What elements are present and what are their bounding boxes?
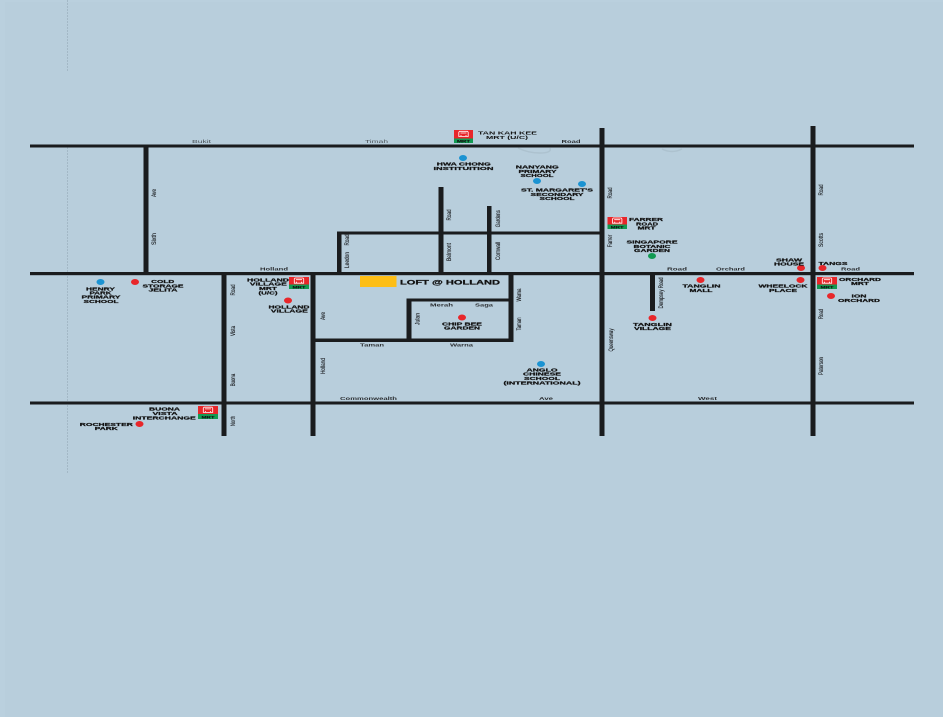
label: Holland Village <box>268 304 311 313</box>
label: Rochester Park: ROCHESTER <box>80 422 134 427</box>
label: St. Margaret's Secondary School <box>521 188 593 201</box>
label: Anglo Chinese School (International): ANGLO <box>526 367 558 372</box>
project marker: Loft @ Holland: LOFT @ HOLLAND <box>400 279 500 286</box>
horizontal road names: Bukit <box>192 139 212 144</box>
horizontal road names: Taman <box>360 343 384 348</box>
horizontal road names: West <box>698 396 718 401</box>
marker: Anglo Chinese School <box>537 361 545 367</box>
label: Ion Orchard: ION <box>852 294 868 299</box>
MRT icon: Buona Vista: MRT <box>202 414 215 419</box>
label: Nanyang Primary School: NANYANG <box>516 165 560 170</box>
label: Farrer Road MRT: FARRER <box>629 217 664 222</box>
label: Orchard MRT: ORCHARD <box>839 277 882 282</box>
label: Farrer Road MRT <box>629 217 664 230</box>
label: Tanglin Village <box>633 322 673 331</box>
label: Cold Storage Jelita: JELITA <box>148 288 179 293</box>
label: Wheelock Place: PLACE <box>769 288 797 293</box>
label: Tangs: TANGS <box>818 261 848 266</box>
label: Hwa Chong Institution: HWA CHONG <box>437 162 492 167</box>
label: Chip Bee Garden <box>442 321 482 331</box>
marker: St. Margaret's Secondary School <box>578 181 586 187</box>
label: Holland Village: HOLLAND <box>268 304 311 309</box>
horizontal road names: Merah <box>430 303 453 308</box>
label: Nanyang Primary School: PRIMARY <box>518 169 556 174</box>
vertical road names: North <box>231 416 237 426</box>
marker: Nanyang Primary School <box>533 178 541 184</box>
vertical road names: Scotts <box>819 233 825 247</box>
marker: Henry Park Primary School <box>96 279 104 285</box>
vertical road names: Holland <box>321 358 327 374</box>
MRT icon: Tan Kah Kee: MRT <box>457 138 471 143</box>
label: Tanglin Village: TANGLIN <box>633 322 673 327</box>
horizontal road names: Road <box>841 266 860 271</box>
marker: Holland Village <box>284 298 292 304</box>
label: Hwa Chong Institution <box>434 162 495 171</box>
label: Shaw House <box>774 257 804 266</box>
vertical road names: Road <box>608 188 614 198</box>
label: Cold Storage Jelita: STORAGE <box>142 283 184 288</box>
label: Buona Vista Interchange <box>133 407 196 420</box>
label: Rochester Park: PARK <box>95 426 119 431</box>
horizontal road names: Commonwealth <box>340 396 397 401</box>
label: St. Margaret's Secondary School: SCHOOL <box>540 196 575 201</box>
MRT icon: Holland Village: MRT <box>292 284 306 289</box>
label: Singapore Botanic Garden <box>626 240 678 253</box>
horizontal road names: Road <box>667 266 687 271</box>
marker: Tangs <box>818 265 826 271</box>
label: Tanglin Village: VILLAGE <box>634 326 671 331</box>
vertical road names: Road <box>345 234 351 246</box>
label: Henry Park Primary School: SCHOOL <box>84 299 119 304</box>
label: Nanyang Primary School: SCHOOL <box>520 173 554 178</box>
marker: Tanglin Mall <box>696 277 704 283</box>
label: Henry Park Primary School: PARK <box>90 290 113 295</box>
marker: Wheelock Place <box>796 277 804 283</box>
horizontal road names: Ave <box>539 396 554 401</box>
MRT icon: Farrer Road <box>608 217 627 229</box>
vertical road names: Ave <box>321 311 327 320</box>
vertical road names: Leedon <box>345 252 351 268</box>
marker: Shaw House <box>797 265 805 271</box>
label: Singapore Botanic Garden: SINGAPORE <box>626 240 678 245</box>
MRT icon: Orchard <box>817 277 837 289</box>
label: Anglo Chinese School (International): CHINESE <box>523 372 561 377</box>
project marker: Loft @ Holland <box>360 276 500 287</box>
vertical road names: Road <box>819 184 825 196</box>
horizontal road names: Warna <box>450 343 474 348</box>
label: Hwa Chong Institution: INSTITUITION <box>434 166 495 171</box>
vertical road names: Ave <box>152 188 158 197</box>
vertical road names: Buona <box>231 373 237 386</box>
label: Nanyang Primary School <box>516 165 560 178</box>
vertical road names: Cornwall <box>496 242 502 260</box>
horizontal road names: Holland <box>260 266 288 271</box>
label: Henry Park Primary School <box>82 286 120 304</box>
label: Cold Storage Jelita: COLD <box>151 279 175 284</box>
label: Ion Orchard <box>838 294 881 303</box>
vertical road names: Road <box>231 284 237 296</box>
marker: Cold Storage Jelita <box>131 279 139 285</box>
horizontal road names <box>192 139 860 401</box>
label: Holland Village MRT (U/C): MRT <box>259 286 277 291</box>
vertical road names: Warna <box>517 288 523 302</box>
label: Chip Bee Garden: CHIP BEE <box>442 321 482 326</box>
label: Buona Vista Interchange: INTERCHANGE <box>133 415 196 420</box>
road network <box>30 126 914 436</box>
label: Orchard MRT: MRT <box>851 281 869 286</box>
vertical road names: Farrer <box>608 235 614 247</box>
MRT icon: Tan Kah Kee <box>454 130 473 143</box>
label: Holland Village MRT (U/C): HOLLAND <box>247 277 290 282</box>
label: Rochester Park <box>80 422 134 431</box>
horizontal road names: Road <box>562 139 581 144</box>
marker: Rochester Park <box>136 421 144 427</box>
label: Tan Kah Kee MRT: TAN KAH KEE <box>478 131 537 136</box>
MRT icon: Farrer Road: MRT <box>611 224 625 229</box>
label: Buona Vista Interchange: VISTA <box>152 411 179 416</box>
label: Buona Vista Interchange: BUONA <box>149 407 181 412</box>
vertical road names: Belmont <box>447 243 453 261</box>
MRT icon: Buona Vista <box>198 406 218 419</box>
label: Cold Storage Jelita <box>142 279 184 293</box>
label: Farrer Road MRT: ROAD <box>636 221 659 226</box>
label: Farrer Road MRT: MRT <box>638 225 656 230</box>
label: Tan Kah Kee MRT: MRT (U/C) <box>486 135 529 140</box>
label: Holland Village: VILLAGE <box>271 308 308 313</box>
label: Shaw House: SHAW <box>776 257 803 262</box>
label: Henry Park Primary School: PRIMARY <box>82 295 120 300</box>
vertical road names: Paterson <box>819 357 825 375</box>
vertical road names: Sixth <box>152 233 158 245</box>
label: St. Margaret's Secondary School: SECONDARY <box>530 192 584 197</box>
label: Ion Orchard: ORCHARD <box>838 298 881 303</box>
vertical road names: Road <box>819 309 825 319</box>
label: Wheelock Place <box>758 283 809 293</box>
vertical road names <box>152 184 825 426</box>
label: Singapore Botanic Garden: GARDEN <box>634 248 671 253</box>
label: Henry Park Primary School: HENRY <box>86 286 115 291</box>
vertical road names: Julan <box>416 313 422 325</box>
horizontal road names: Saga <box>475 303 494 308</box>
label: Anglo Chinese School (International): (INTERNATIONAL) <box>504 380 581 385</box>
label: Wheelock Place: WHEELOCK <box>758 283 809 288</box>
label: Anglo Chinese School (International): SCHOOL <box>524 376 560 381</box>
label: Tanglin Mall: MALL <box>690 288 713 293</box>
vertical road names: Dempsey Road <box>659 278 665 308</box>
label: Tan Kah Kee MRT <box>478 131 537 140</box>
marker: Hwa Chong Institution <box>459 155 467 161</box>
label: St. Margaret's Secondary School: ST. MARGARET'S <box>521 188 593 193</box>
horizontal road names: Orchard <box>716 266 745 271</box>
label: Orchard MRT <box>839 277 882 286</box>
label: Tanglin Mall: TANGLIN <box>682 284 722 289</box>
label: Anglo Chinese School (International) <box>504 367 581 385</box>
label: Holland Village MRT (U/C): VILLAGE <box>250 282 287 287</box>
marker: Ion Orchard <box>827 293 835 299</box>
vertical road names: Gardens <box>496 210 502 227</box>
horizontal road names: Timah <box>365 139 389 144</box>
vertical road names: Queensway <box>609 328 615 352</box>
marker: Tanglin Village <box>648 315 656 321</box>
vertical road names: Road <box>447 210 453 220</box>
vertical road names: Taman <box>517 318 523 330</box>
marker: Chip Bee Garden <box>458 314 466 320</box>
label: Holland Village MRT (U/C) <box>247 277 290 295</box>
vertical road names: Vista <box>231 326 237 336</box>
label: Tanglin Mall <box>682 284 722 293</box>
label: Holland Village MRT (U/C): (U/C) <box>258 290 278 295</box>
label: Chip Bee Garden: GARDEN <box>444 326 481 331</box>
marker: Singapore Botanic Garden <box>648 253 656 259</box>
label: Singapore Botanic Garden: BOTANIC <box>634 244 672 249</box>
MRT icon: Orchard: MRT <box>820 284 834 289</box>
MRT icon: Holland Village <box>289 277 309 289</box>
label: Shaw House: HOUSE <box>774 261 804 266</box>
